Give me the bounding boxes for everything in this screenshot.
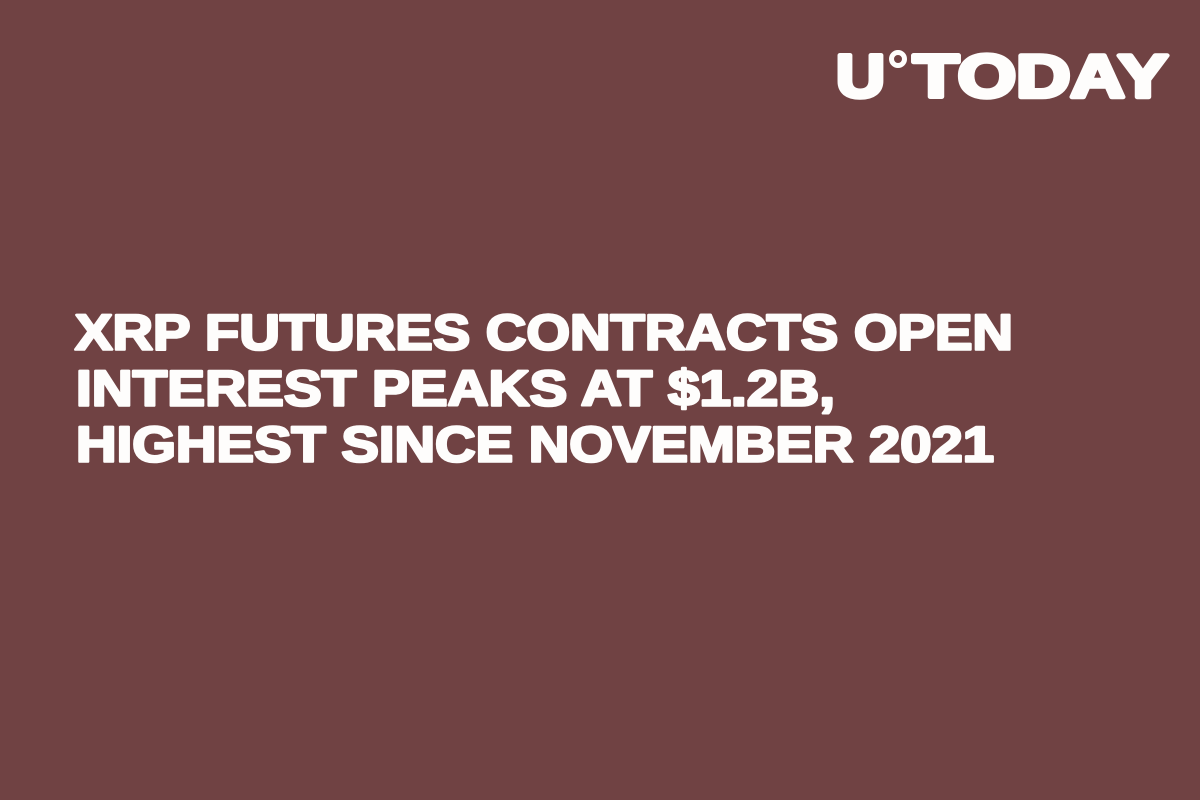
title <box>75 305 1013 473</box>
logo: U.Today: TODAY <box>913 43 1168 110</box>
logo: U.Today: U <box>836 43 885 110</box>
logo: U.Today <box>836 43 1168 110</box>
title: XRP FUTURES CONTRACTS OPEN <box>75 305 1013 361</box>
title: HIGHEST SINCE NOVEMBER 2021 <box>76 417 994 473</box>
title: INTEREST PEAKS AT $1.2B, <box>76 361 835 417</box>
